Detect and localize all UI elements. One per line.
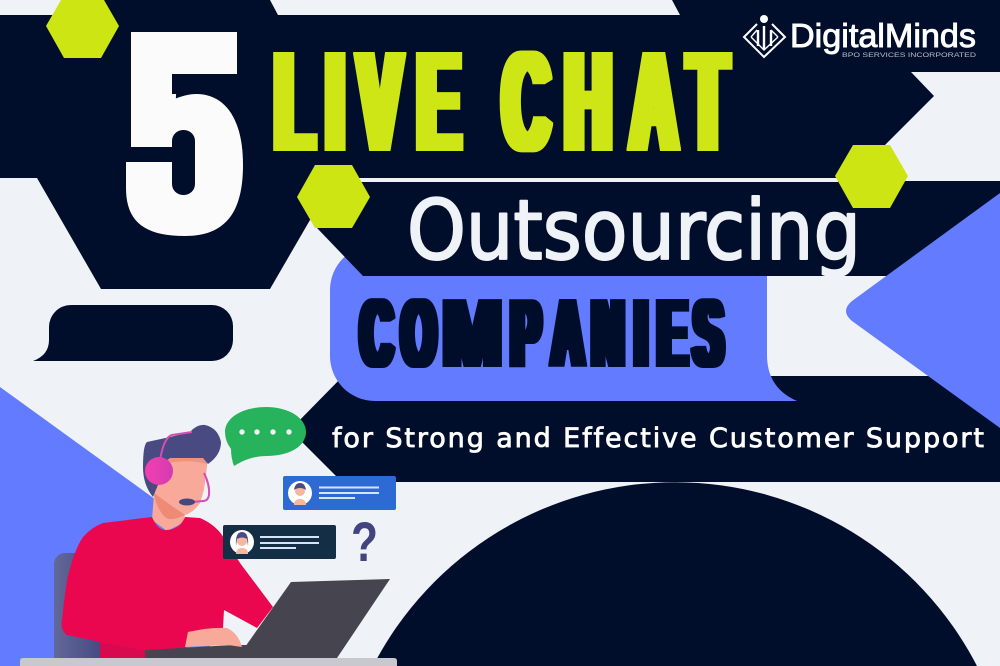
- neck and face: [150, 455, 207, 531]
- hand: [185, 628, 242, 647]
- title: live chat: LIVE CHAT: [275, 24, 727, 181]
- shape: top dark banner with hexagon: [0, 0, 1000, 289]
- title: companies: CO: [361, 280, 435, 387]
- icon: logo diamond: [744, 15, 785, 57]
- shape: right blue triangle: [846, 193, 1000, 428]
- logo wordmark: DigitalMinds: [790, 17, 976, 54]
- shape: lower dark banner: [290, 374, 1000, 482]
- icon: green chat bubble: [225, 407, 306, 466]
- shape: blue companies bubble: [330, 245, 797, 401]
- logo: digitalminds: [744, 15, 976, 59]
- desk: [20, 658, 397, 666]
- jaw shadow: [154, 493, 185, 519]
- title: companies: PANIES: [511, 280, 723, 387]
- title: outsourcing: Outsourcing: [407, 182, 861, 279]
- shape: dark speech bubble: [33, 305, 233, 361]
- headset: [145, 432, 209, 506]
- title: companies: M: [443, 280, 502, 387]
- laptop screen: [245, 579, 390, 658]
- divider line: [360, 179, 838, 182]
- sweater: [62, 517, 273, 658]
- logo tagline: BPO SERVICES INCORPORATED: [842, 52, 976, 59]
- forehead shade: [168, 458, 207, 464]
- headband: [160, 432, 192, 460]
- ear cup: [145, 457, 173, 485]
- sweater shade: [100, 642, 145, 658]
- hexagon: centre: [297, 165, 370, 228]
- icon: question mark: ?: [351, 510, 378, 573]
- mic arm: [192, 473, 209, 502]
- title: companies: [361, 280, 723, 387]
- hexagon: right: [835, 145, 908, 208]
- hexagon: top left: [46, 0, 119, 58]
- shape: outsourcing dark band: [317, 181, 1000, 276]
- shape: left blue triangle: [0, 387, 210, 666]
- subtitle: for Strong and Effective Customer Support: [332, 423, 984, 454]
- chair: [54, 553, 105, 658]
- chat card: blue: [283, 476, 396, 510]
- shape: bottom dark dome: [373, 482, 977, 666]
- chat card: dark: [223, 525, 336, 559]
- laptop base: [145, 645, 337, 658]
- mic: [179, 498, 195, 506]
- hair: [143, 425, 221, 497]
- illustration: support agent: [20, 425, 397, 666]
